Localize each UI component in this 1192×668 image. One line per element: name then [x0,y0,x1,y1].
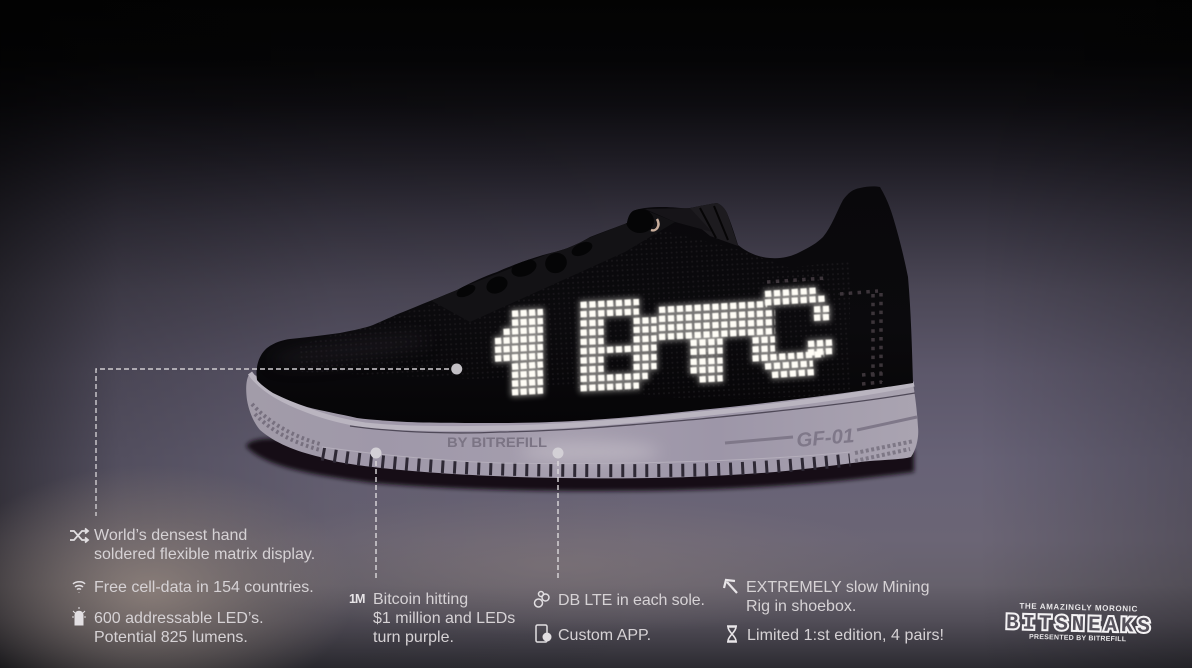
sole embossed lines [725,417,917,443]
feature: LEDs: 600 addressable LED’s. [94,610,264,627]
feature: mining [724,579,929,615]
digit 1 [495,312,543,392]
letter C [752,290,832,375]
feature: 1M: $1 million and LEDs [373,610,515,627]
eyelet [651,219,658,230]
callout: matrix display line [96,364,462,516]
feature: LEDs [72,607,264,646]
icon: shuffle [70,528,88,542]
feature: 1M: Bitcoin hitting [373,591,468,608]
feature: limited edition: Limited 1:st edition, 4 pairs! [747,627,944,644]
lace holes [455,209,654,300]
logo: Bitsneaks [1006,601,1150,644]
feature: matrix display: World’s densest hand [94,527,247,544]
feature: matrix display [70,527,315,563]
callout: 1M line [370,448,382,578]
icon: 1M: 1M [349,592,365,606]
tread [322,454,850,471]
sole [246,373,918,478]
icon: pickaxe [724,580,737,593]
letter T [659,304,775,380]
logo: Bitsneaks: PRESENTED BY BITREFILL [1029,634,1127,643]
feature: app: Custom APP. [558,627,651,644]
lace band [430,212,675,322]
LED display 1BTC [495,290,832,392]
icon: hourglass [727,626,737,642]
feature: mining: EXTREMELY slow Mining [746,579,929,596]
dim matrix [767,278,882,384]
feature: mining: Rig in shoebox. [746,598,856,615]
shoe [246,186,918,491]
feature: 1M [349,591,515,646]
icon: wifi [73,582,85,592]
icon: nodes [534,592,549,607]
sole embossed brand text: BY BITREFILL [447,434,547,450]
logo: Bitsneaks: BITSNEAKS [1006,612,1150,639]
ground shadow [246,438,914,491]
tongue [685,203,738,246]
feature: 1M: turn purple. [373,629,454,646]
logo: Bitsneaks: THE AMAZINGLY MORONIC [1019,601,1138,614]
feature: LEDs: Potential 825 lumens. [94,629,248,646]
feature: LTE: DB LTE in each sole. [558,592,705,609]
icon: phone tap [536,625,552,642]
icon: light [72,607,86,625]
feature: cell data: Free cell-data in 154 countries. [94,579,314,596]
upper [257,186,913,423]
sole rim [250,373,914,429]
callout: LTE line [552,448,564,578]
letter B [580,302,657,388]
feature: matrix display: soldered flexible matrix display. [94,546,315,563]
sole embossed model text: GF-01 [796,425,855,452]
